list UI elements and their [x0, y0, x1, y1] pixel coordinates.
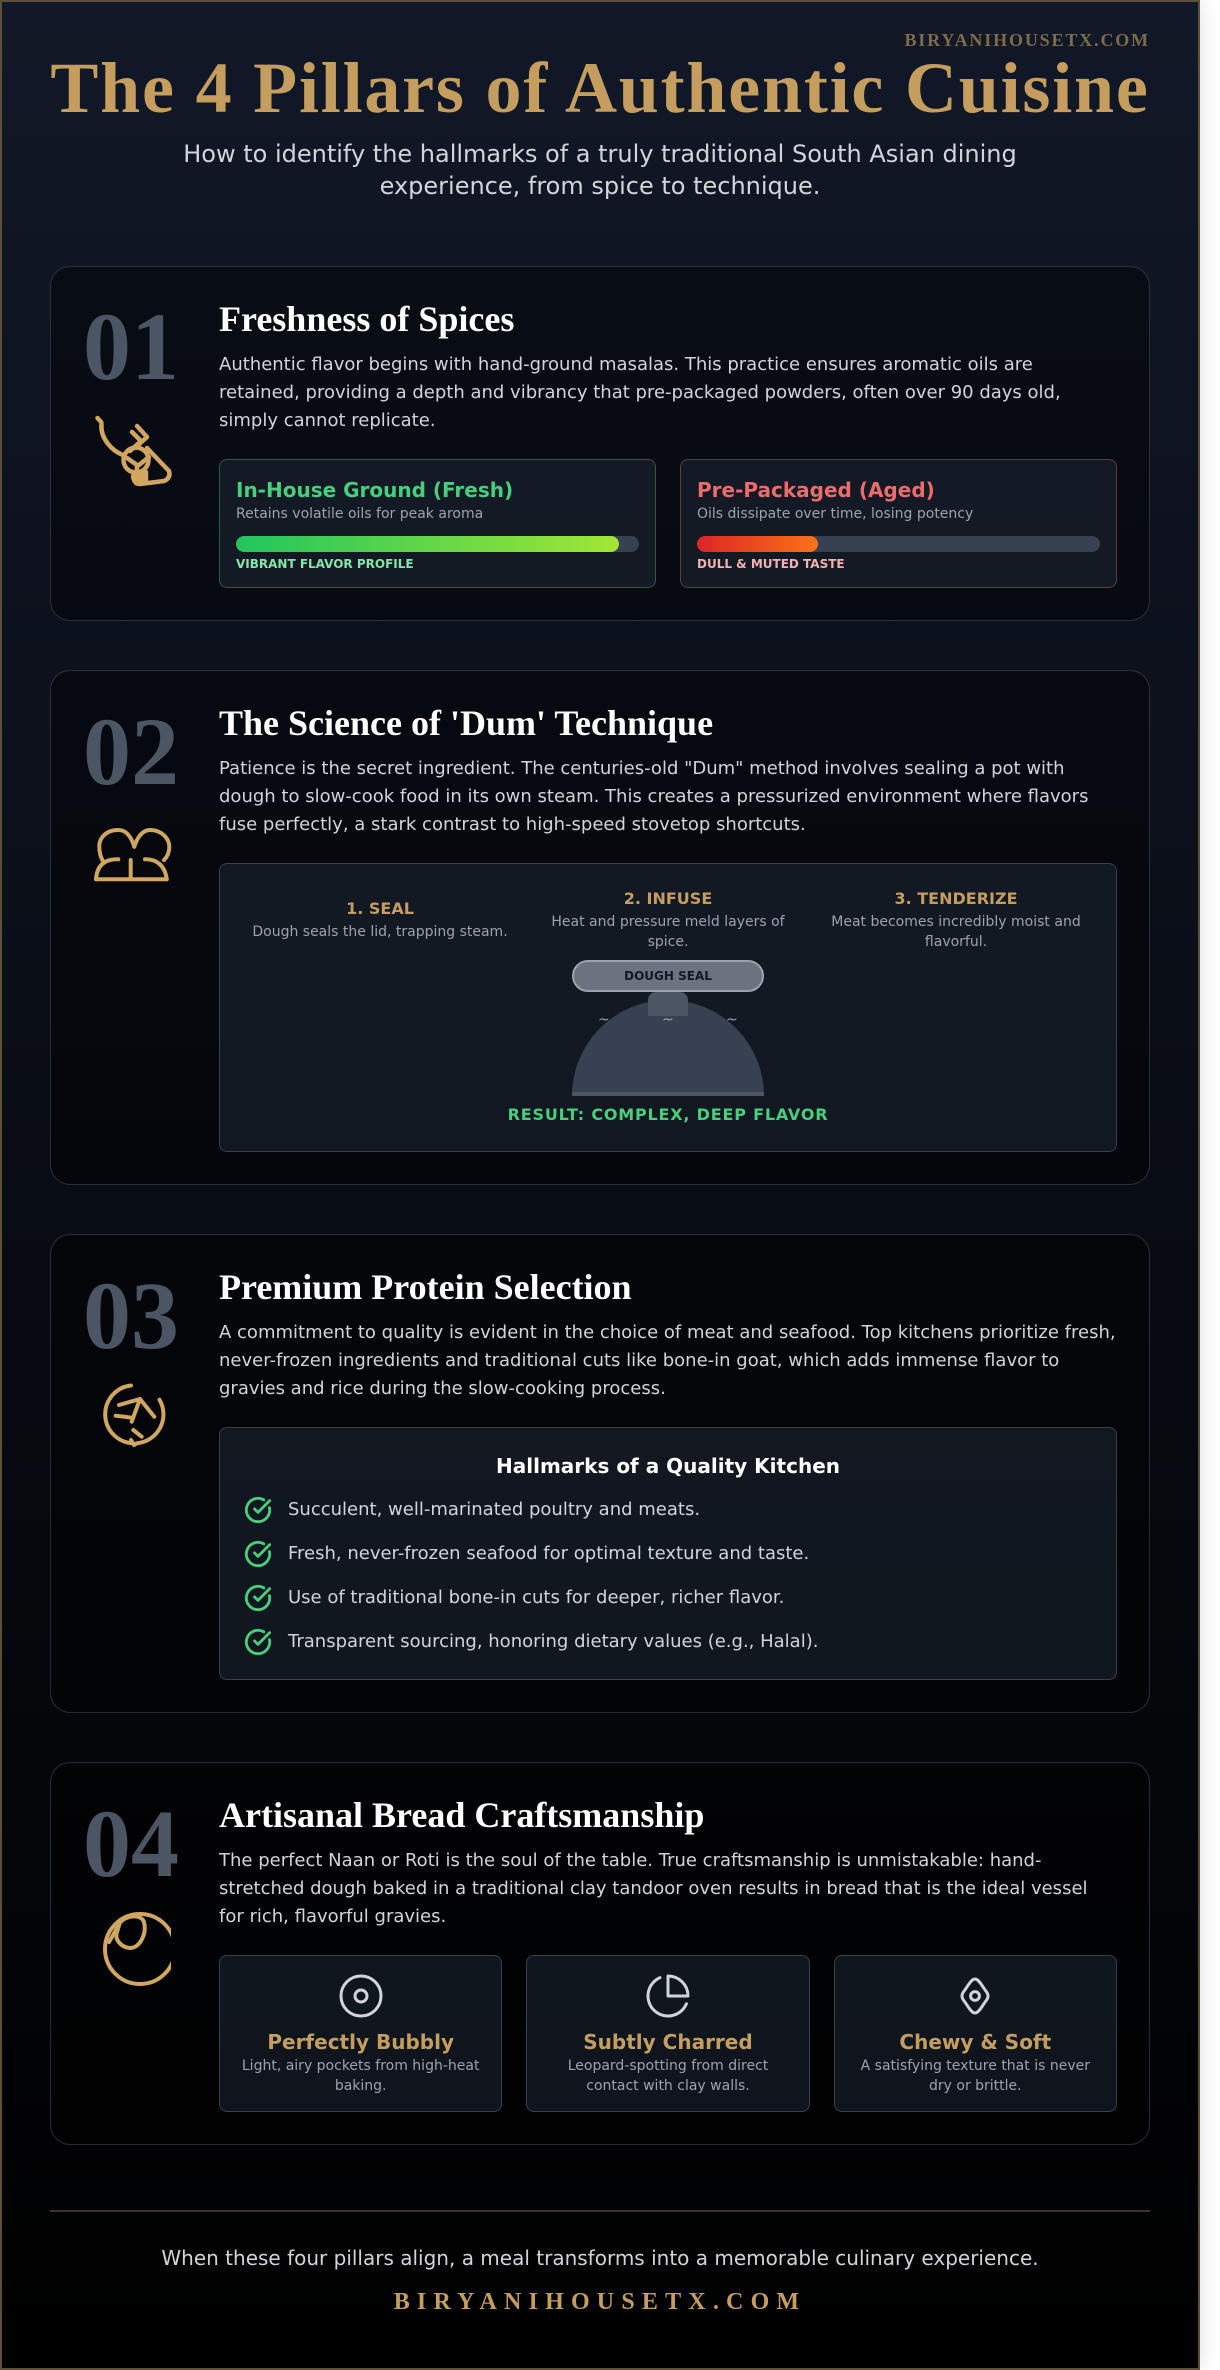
icon: protein — [103, 1384, 166, 1448]
icon: naan — [103, 1912, 171, 1986]
footer divider — [50, 2210, 1150, 2212]
number 04: 04 — [83, 1790, 179, 1897]
steam marks: ~ — [598, 1012, 610, 1028]
check item 3: Use of traditional bone-in cuts for deeper, richer flavor. — [288, 1587, 784, 1608]
comparison: aged: Pre-Packaged (Aged) — [697, 478, 935, 502]
number 03: 03 — [83, 1262, 179, 1369]
hallmarks checklist — [219, 1427, 1117, 1680]
checklist heading: Hallmarks of a Quality Kitchen — [496, 1454, 840, 1478]
attribute: bubbly — [219, 1955, 502, 2112]
brand top: BIRYANIHOUSETX.COM — [904, 30, 1150, 50]
comparison bars — [219, 459, 1117, 588]
pot knob — [648, 992, 688, 1016]
bread attributes — [219, 1955, 1117, 2112]
comparison: fresh — [219, 459, 656, 588]
icon: chef hat — [94, 828, 172, 882]
comparison: fresh: In-House Ground (Fresh) — [236, 478, 513, 502]
attribute: charred: Leopard-spotting from direct contact with clay walls. — [568, 2058, 768, 2094]
heading: The Science of 'Dum' Technique — [219, 703, 713, 743]
heading: Freshness of Spices — [219, 299, 514, 339]
steam marks — [598, 1012, 738, 1028]
pot dome — [572, 1000, 764, 1096]
body text: Authentic flavor begins with hand-ground masalas. This practice ensures aromatic oils are retained, providing a depth and vibrancy that pre-packaged powders, often over 90 days old, simply cannot replicate. — [219, 354, 1061, 431]
attribute: chewy: A satisfying texture that is never dry or brittle. — [861, 2058, 1090, 2094]
title: The 4 Pillars of Authentic Cuisine — [50, 48, 1150, 128]
icon: disc — [340, 1974, 382, 2018]
heading: Premium Protein Selection — [219, 1267, 632, 1307]
number 01: 01 — [83, 293, 179, 400]
panel: bread craftsmanship — [50, 1762, 1150, 2145]
step 3: Meat becomes incredibly moist and flavorful. — [831, 914, 1081, 950]
steam marks: ~ — [726, 1012, 738, 1028]
number 02: 02 — [83, 698, 179, 805]
dough seal — [572, 960, 764, 992]
attribute: charred: Subtly Charred — [583, 2030, 753, 2054]
comparison: aged: Oils dissipate over time, losing potency — [697, 506, 973, 522]
result label: RESULT: COMPLEX, DEEP FLAVOR — [508, 1105, 828, 1124]
step 2 — [551, 889, 785, 950]
closing statement: When these four pillars align, a meal transforms into a memorable culinary experience. — [161, 2246, 1039, 2270]
step 3: 3. TENDERIZE — [894, 889, 1018, 908]
panel: freshness of spices — [50, 266, 1150, 621]
subtitle: How to identify the hallmarks of a truly traditional South Asian dining — [183, 140, 1017, 168]
panel: protein selection — [50, 1234, 1150, 1713]
dough seal: DOUGH SEAL — [624, 969, 712, 983]
attribute: chewy — [834, 1955, 1117, 2112]
attribute: bubbly: Light, airy pockets from high-heat baking. — [242, 2058, 479, 2094]
check item 4: Transparent sourcing, honoring dietary values (e.g., Halal). — [288, 1631, 818, 1652]
body text: A commitment to quality is evident in the choice of meat and seafood. Top kitchens prioritize fresh, never-frozen ingredients and traditional cuts like bone-in goat, which adds immense flavor to gravies and rice during the slow-cooking process. — [219, 1322, 1116, 1399]
step 1: Dough seals the lid, trapping steam. — [252, 924, 508, 940]
subtitle — [183, 140, 1017, 200]
heading: Artisanal Bread Craftsmanship — [219, 1795, 704, 1835]
icon: dough — [960, 1978, 990, 2014]
steam marks: ~ — [662, 1012, 674, 1028]
check item 2: Fresh, never-frozen seafood for optimal texture and taste. — [288, 1543, 809, 1564]
attribute: chewy: Chewy & Soft — [899, 2030, 1051, 2054]
step 3 — [831, 889, 1081, 950]
comparison: aged: DULL & MUTED TASTE — [697, 557, 845, 571]
icon: pie — [646, 1974, 690, 2018]
comparison: aged — [680, 459, 1117, 588]
panel: dum technique — [50, 670, 1150, 1185]
step 2: Heat and pressure meld layers of spice. — [551, 914, 785, 950]
comparison: fresh: VIBRANT FLAVOR PROFILE — [236, 557, 414, 571]
subtitle: experience, from spice to technique. — [380, 172, 820, 200]
brand footer: BIRYANIHOUSETX.COM — [394, 2289, 806, 2315]
icon: mortar and spice — [95, 416, 172, 486]
dum process diagram — [219, 863, 1117, 1152]
attribute: charred — [526, 1955, 810, 2112]
comparison: fresh: Retains volatile oils for peak aroma — [236, 506, 483, 522]
step 2: 2. INFUSE — [624, 889, 712, 908]
step 1: 1. SEAL — [346, 899, 414, 918]
attribute: bubbly: Perfectly Bubbly — [267, 2030, 454, 2054]
step 1 — [252, 899, 508, 940]
body text: Patience is the secret ingredient. The centuries-old "Dum" method involves sealing a pot with dough to slow-cook food in its own steam. This creates a pressurized environment where flavors fuse perfectly, a stark contrast to high-speed stovetop shortcuts. — [219, 758, 1088, 835]
check item 1: Succulent, well-marinated poultry and meats. — [288, 1499, 700, 1520]
body text: The perfect Naan or Roti is the soul of the table. True craftsmanship is unmistakable: hand-stretched dough baked in a traditional clay tandoor oven results in bread that is the ideal vessel for rich, flavorful gravies. — [219, 1850, 1088, 1927]
